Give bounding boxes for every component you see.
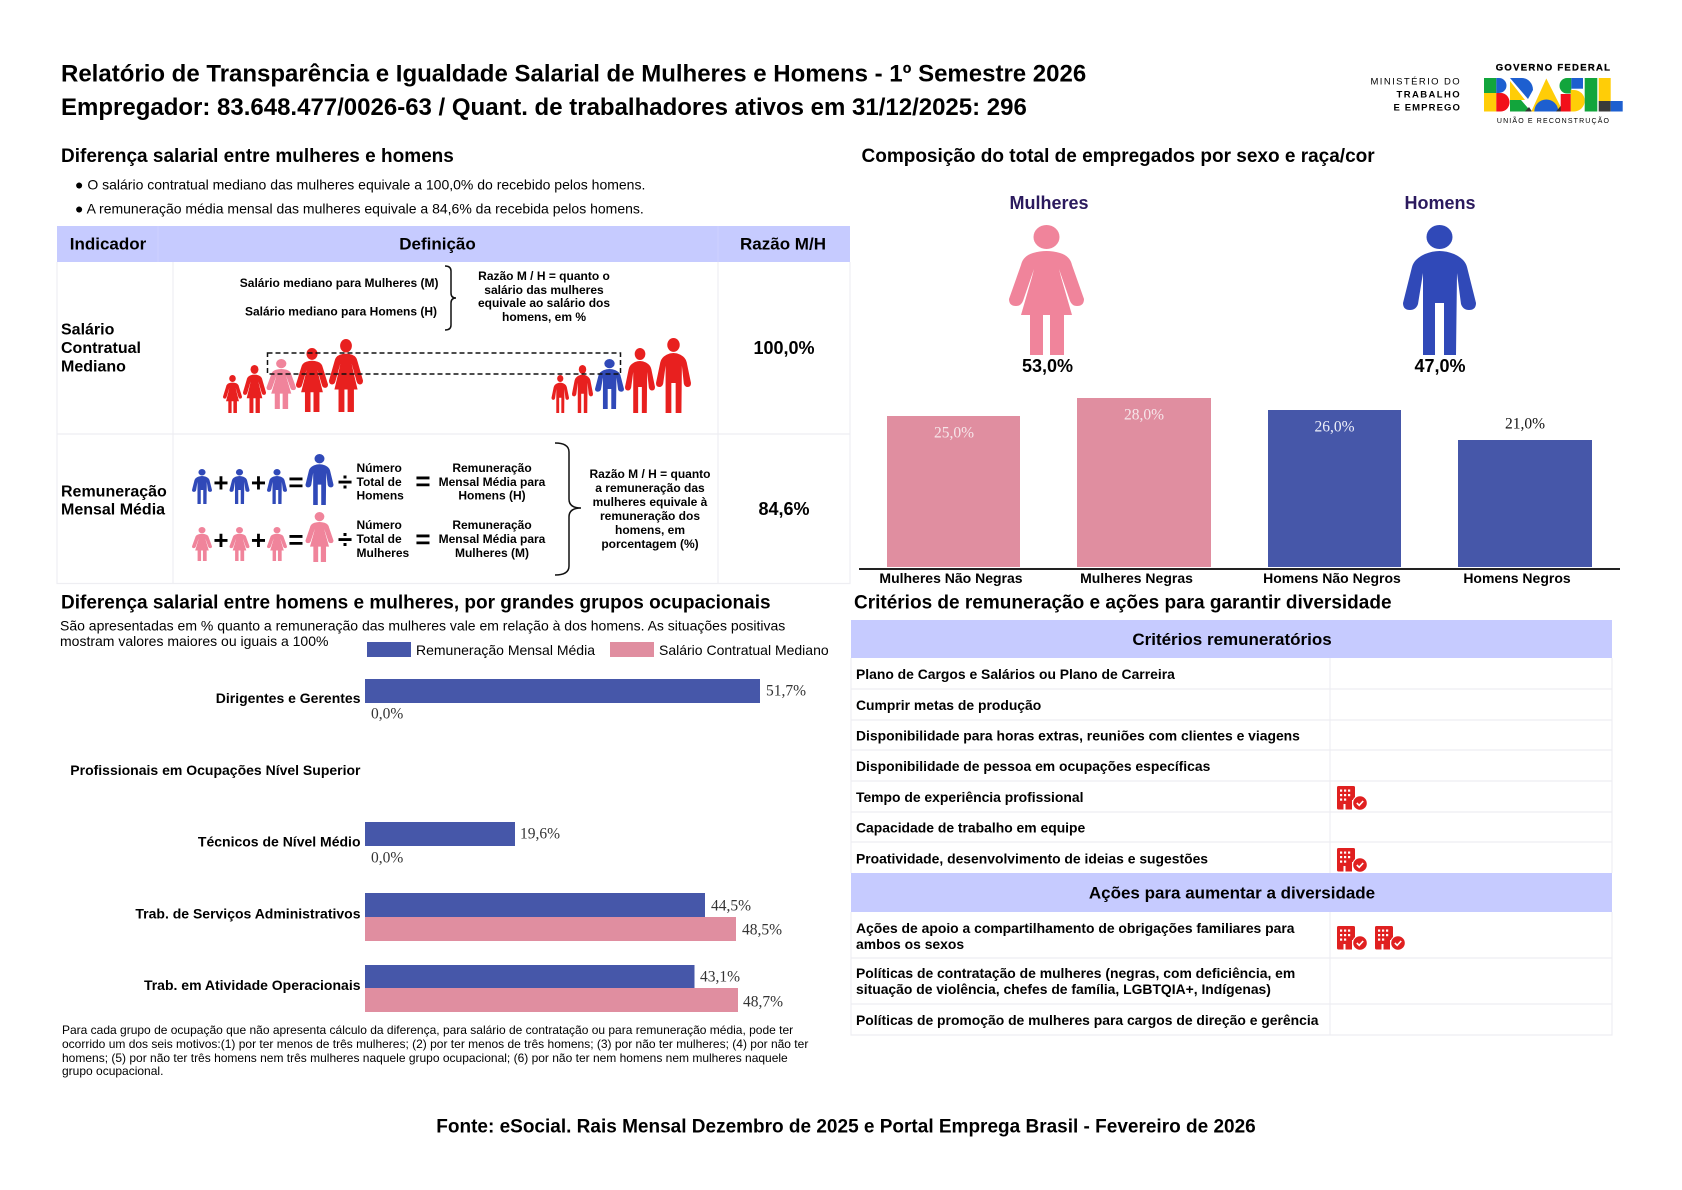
- formula: homens: =: [288, 467, 304, 497]
- table header: Razão M/H: [740, 234, 826, 254]
- heading: composição: Composição do total de empregados por sexo e raça/cor: [862, 146, 1375, 167]
- table: critérios remuneratórios: Tempo de experiência profissional: [856, 789, 1083, 805]
- logo: Ministério do Trabalho e Emprego: MINISTÉRIO DO: [1370, 76, 1461, 88]
- bar chart: grupos ocupacionais: 48,5%: [742, 922, 782, 938]
- table: indicadores: [57, 226, 850, 584]
- logo: Ministério do Trabalho e Emprego: E EMPREGO: [1394, 102, 1461, 114]
- footnote: [62, 1023, 808, 1078]
- formula: mulheres: ÷: [338, 524, 352, 554]
- formula: homens: Total de: [356, 475, 402, 489]
- row label: salário contratual mediano: Mediano: [61, 358, 126, 376]
- formula: homens: Mensal Média para: [439, 475, 546, 489]
- row label: remuneração mensal média: Mensal Média: [61, 502, 165, 518]
- legend: Remuneração Mensal Média: [416, 642, 595, 658]
- row 1 definitions: Salário mediano para Mulheres (M): [240, 276, 438, 290]
- brace and razão text: porcentagem (%): [601, 537, 699, 551]
- table: critérios remuneratórios: Ações de apoio a compartilhamento de obrigações familiares para: [856, 920, 1295, 936]
- formula: homens: =: [415, 466, 431, 496]
- bar chart: grupos ocupacionais: [70, 679, 806, 1012]
- footnote: grupo ocupacional.: [62, 1064, 163, 1078]
- bar chart: sexo e raça/cor: Mulheres Não Negras: [879, 570, 1023, 586]
- table: critérios remuneratórios: Capacidade de trabalho em equipe: [856, 820, 1086, 836]
- value: 53,0%: 53,0%: [1022, 356, 1073, 376]
- bar chart: sexo e raça/cor: 26,0%: [1314, 418, 1355, 436]
- row label: remuneração mensal média: Remuneração: [61, 484, 167, 500]
- row 1 definitions: Salário mediano para Homens (H): [245, 304, 437, 318]
- logo: Governo Federal Brasil: GOVERNO FEDERAL: [1496, 62, 1611, 74]
- value: 84,6%: 84,6%: [758, 499, 810, 519]
- formula: mulheres: =: [415, 524, 431, 554]
- formula: homens: Homens (H): [458, 488, 526, 502]
- table: critérios remuneratórios: Plano de Cargos e Salários ou Plano de Carreira: [856, 666, 1175, 682]
- brace and razão text: homens, em: [615, 523, 685, 537]
- title: [61, 60, 1086, 121]
- row label: salário contratual mediano: Contratual: [61, 340, 141, 357]
- formula: mulheres: Mulheres (M): [455, 546, 529, 560]
- panel: diferença salarial entre mulheres e homens: [57, 146, 850, 584]
- table header: [70, 234, 826, 254]
- panel: composição do total de empregados: [859, 146, 1620, 586]
- heading: critérios e ações: Critérios de remuneração e ações para garantir diversidade: [854, 592, 1392, 614]
- formula: mulheres: =: [288, 524, 304, 554]
- footnote: homens; (5) por não ter três homens nem três mulheres naquele grupo ocupacional; (6) por não ter nem homens nem mulheres naquele: [62, 1051, 788, 1065]
- table header: Definição: [399, 234, 476, 254]
- description: mostram valores maiores ou iguais a 100%: [60, 633, 328, 649]
- row 1 definitions: [240, 266, 610, 330]
- bar chart: grupos ocupacionais: Trab. de Serviços Administrativos: [135, 906, 361, 922]
- formula: homens: +: [251, 468, 266, 498]
- row 1 definitions: homens, em %: [502, 310, 586, 324]
- heading: grupos ocupacionais: Diferença salarial entre homens e mulheres, por grandes grupos ocupacionais: [61, 592, 771, 614]
- bar chart: grupos ocupacionais: 43,1%: [700, 968, 740, 986]
- row 1 definitions: equivale ao salário dos: [478, 296, 610, 310]
- table: critérios remuneratórios: situação de violência, chefes de família, LGBTQIA+, Indígenas): [856, 981, 1271, 997]
- bar chart: sexo e raça/cor: Mulheres Negras: [1080, 570, 1193, 586]
- footnote: Para cada grupo de ocupação que não apresenta cálculo da diferença, para salário de contratação ou para remuneração média, pode ter: [62, 1023, 793, 1037]
- formula: mulheres: Número: [356, 518, 402, 532]
- table: critérios remuneratórios: Proatividade, desenvolvimento de ideias e sugestões: [856, 850, 1208, 866]
- bullet list: ● A remuneração média mensal das mulheres equivale a 84,6% da recebida pelos homens.: [75, 200, 644, 216]
- formula: mulheres: Mulheres: [356, 546, 410, 560]
- bullet list: ● O salário contratual mediano das mulheres equivale a 100,0% do recebido pelos homens.: [75, 176, 645, 192]
- icon: men median group: [552, 338, 691, 413]
- brace and razão text: mulheres equivale à: [593, 495, 708, 509]
- bar chart: grupos ocupacionais: 51,7%: [766, 682, 806, 700]
- icon: woman: [1009, 225, 1084, 355]
- table: critérios remuneratórios: Ações para aumentar a diversidade: [1089, 884, 1375, 902]
- row label: salário contratual mediano: [61, 322, 141, 376]
- label: mulheres: Mulheres: [1009, 193, 1089, 213]
- bar chart: grupos ocupacionais: Dirigentes e Gerentes: [216, 690, 361, 706]
- legend: Salário Contratual Mediano: [659, 642, 829, 658]
- bar chart: grupos ocupacionais: 19,6%: [520, 826, 560, 842]
- brace and razão text: [555, 443, 711, 575]
- row 1 definitions: Razão M / H = quanto o: [478, 269, 610, 283]
- formula: homens: +: [213, 468, 229, 498]
- logo: Ministério do Trabalho e Emprego: TRABALHO: [1396, 90, 1461, 100]
- bar chart: grupos ocupacionais: 48,7%: [743, 994, 783, 1010]
- bar chart: grupos ocupacionais: Profissionais em Ocupações Nível Superior: [70, 762, 361, 778]
- bar chart: sexo e raça/cor: Homens Não Negros: [1263, 570, 1401, 586]
- bar chart: grupos ocupacionais: 0,0%: [371, 850, 403, 866]
- row label: remuneração mensal média: [61, 484, 167, 518]
- table: critérios remuneratórios: Disponibilidade de pessoa em ocupações específicas: [856, 758, 1211, 774]
- brace and razão text: Razão M / H = quanto: [589, 467, 711, 481]
- bar chart: sexo e raça/cor: Homens Negros: [1463, 570, 1571, 586]
- bar chart: sexo e raça/cor: 28,0%: [1124, 406, 1164, 424]
- label: homens: Homens: [1404, 193, 1476, 213]
- table: critérios remuneratórios: Cumprir metas de produção: [856, 697, 1041, 713]
- panel: critérios de remuneração: [851, 592, 1612, 1035]
- formula: mulheres: +: [251, 525, 266, 555]
- formula: mulheres: Mensal Média para: [439, 532, 546, 546]
- table: critérios remuneratórios: Critérios remuneratórios: [1132, 630, 1332, 649]
- bar chart: grupos ocupacionais: Técnicos de Nível Médio: [198, 834, 360, 850]
- formula: mulheres: Remuneração: [452, 518, 532, 532]
- logo: Ministério do Trabalho e Emprego: [1370, 76, 1461, 114]
- panel: diferença por grupos ocupacionais: [60, 592, 829, 1078]
- formula: mulheres: [192, 512, 546, 562]
- value: 100,0%: 100,0%: [753, 338, 815, 358]
- legend: [367, 642, 829, 658]
- icon: man: [1403, 225, 1476, 355]
- bullet list: [75, 176, 645, 216]
- bar chart: grupos ocupacionais: 0,0%: [371, 706, 403, 722]
- title: Empregador: 83.648.477/0026-63 / Quant. de trabalhadores ativos em 31/12/2025: 296: [61, 94, 1027, 121]
- logo: Governo Federal Brasil: [1484, 62, 1623, 125]
- table: critérios remuneratórios: [851, 620, 1612, 1035]
- formula: homens: ÷: [338, 466, 352, 496]
- brace and razão text: a remuneração das: [595, 481, 705, 495]
- heading: diferença salarial: Diferença salarial entre mulheres e homens: [61, 146, 454, 167]
- formula: mulheres: +: [213, 525, 229, 555]
- footer source: Fonte: eSocial. Rais Mensal Dezembro de 2025 e Portal Emprega Brasil - Fevereiro de 2026: [436, 1116, 1256, 1138]
- formula: homens: [192, 454, 546, 505]
- icon: empresa proatividade: [1337, 848, 1368, 873]
- formula: mulheres: Total de: [356, 532, 402, 546]
- formula: homens: Remuneração: [452, 461, 532, 475]
- table: critérios remuneratórios: ambos os sexos: [856, 936, 964, 952]
- bar chart: grupos ocupacionais: Trab. em Atividade Operacionais: [144, 977, 361, 993]
- row label: salário contratual mediano: Salário: [61, 322, 115, 338]
- logo: Governo Federal Brasil: UNIÃO E RECONSTRUÇÃO: [1497, 116, 1610, 125]
- title: Relatório de Transparência e Igualdade Salarial de Mulheres e Homens - 1º Semestre 2026: [61, 60, 1086, 88]
- table: critérios remuneratórios: Políticas de promoção de mulheres para cargos de direção e gerência: [856, 1012, 1319, 1028]
- icons: empresas apoio: [1337, 926, 1406, 951]
- icon: empresa tempo de experiência: [1337, 786, 1368, 811]
- table: critérios remuneratórios: Políticas de contratação de mulheres (negras, com deficiência, em: [856, 965, 1295, 981]
- bar chart: sexo e raça/cor: 21,0%: [1505, 416, 1545, 432]
- bar chart: grupos ocupacionais: 44,5%: [711, 898, 751, 914]
- bar chart: sexo e raça/cor: 25,0%: [934, 424, 974, 442]
- description: São apresentadas em % quanto a remuneração das mulheres vale em relação à dos homens. As situações positivas: [60, 618, 785, 634]
- brace and razão text: remuneração dos: [600, 509, 700, 523]
- footnote: ocorrido um dos seis motivos:(1) por ter menos de três mulheres; (2) por ter menos de três homens; (3) por não ter mulheres; (4) por não ter: [62, 1037, 808, 1051]
- value: 47,0%: 47,0%: [1414, 356, 1466, 376]
- table header: Indicador: [70, 234, 147, 254]
- bar chart: sexo e raça/cor: [859, 398, 1620, 586]
- formula: homens: Número: [356, 461, 402, 475]
- formula: homens: Homens: [356, 488, 404, 502]
- description: [60, 618, 785, 649]
- row 1 definitions: salário das mulheres: [484, 283, 604, 297]
- icon: women median group: [223, 339, 363, 413]
- table: critérios remuneratórios: Disponibilidade para horas extras, reuniões com clientes e viagens: [856, 728, 1300, 744]
